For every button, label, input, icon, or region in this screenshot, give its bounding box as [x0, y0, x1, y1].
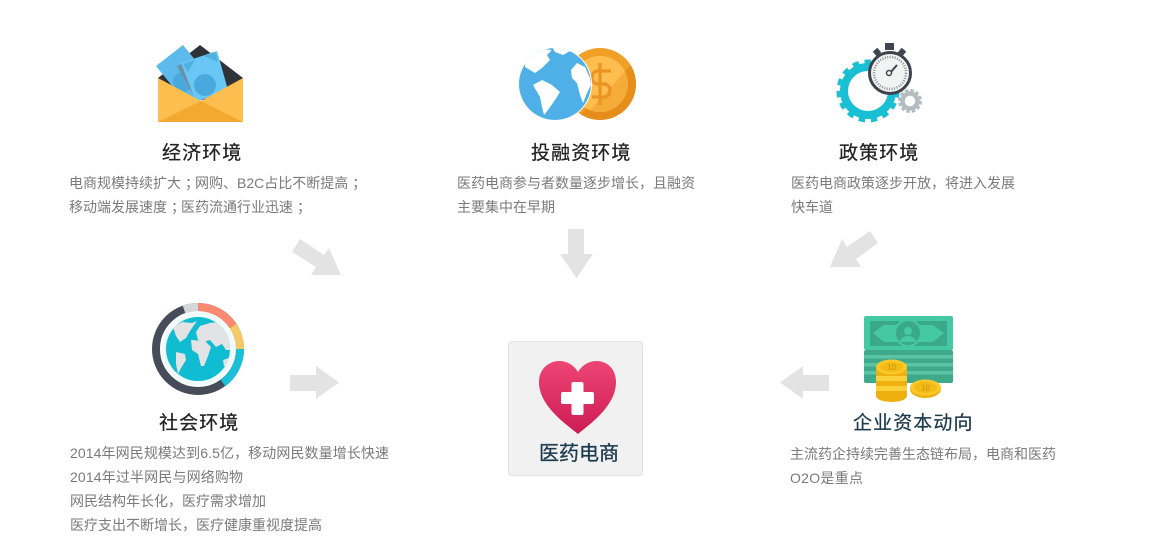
icon: globe and coin [519, 48, 636, 120]
text: policy description [791, 175, 1015, 215]
arrow: economic to center [292, 239, 341, 275]
text: social description: 网民结构年长化，医疗需求增加 [70, 493, 266, 509]
text: economic description [69, 175, 366, 216]
text: policy description: 医药电商政策逐步开放，将进入发展 [791, 175, 1015, 191]
text: social description: 2014年过半网民与网络购物 [70, 469, 243, 485]
panel: investment environment [457, 47, 695, 215]
arrow: capital to center [780, 366, 829, 399]
heading: 社会环境: 社会环境 [159, 412, 239, 434]
text: economic description: 移动端发展速度 ；医药流通行业迅速 ； [69, 199, 311, 216]
text: investment description [457, 175, 695, 215]
text: policy description: 快车道 [791, 199, 833, 215]
icon: cash and coins: 10 [921, 384, 930, 392]
card background [508, 342, 642, 476]
arrow: investment to center [560, 229, 593, 278]
text: capital description: O2O是重点 [790, 470, 863, 486]
panel: policy environment [791, 43, 1015, 215]
text: social description [70, 445, 389, 533]
icon: envelope with banknotes [156, 45, 243, 122]
heading: 投融资环境: 投融资环境 [531, 142, 632, 164]
panel: center pharmaceutical e-commerce [508, 342, 642, 476]
heading: 经济环境: 经济环境 [162, 142, 242, 164]
text: economic description: 电商规模持续扩大 ；网购、B2C占比不断提高 ； [69, 175, 366, 192]
heading: 政策环境: 政策环境 [839, 142, 919, 164]
text: social description: 医疗支出不断增长，医疗健康重视度提高 [70, 517, 322, 533]
icon: cash and coins: 10 [887, 363, 896, 372]
panel: social environment [70, 307, 389, 533]
text: social description: 2014年网民规模达到6.5亿，移动网民数量增长快速 [70, 445, 389, 461]
arrow: social to center [290, 366, 339, 399]
icon: globe with ring [156, 307, 240, 391]
panel: economic environment [69, 45, 366, 216]
heading: 医药电商: 医药电商 [539, 442, 619, 465]
icon: cash and coins [864, 316, 953, 402]
icon: gears and stopwatch [838, 43, 920, 120]
heading: 企业资本动向: 企业资本动向 [853, 412, 974, 434]
text: capital description: 主流药企持续完善生态链布局，电商和医药 [790, 446, 1056, 462]
arrow: policy to center [830, 231, 878, 267]
text: investment description: 主要集中在早期 [457, 199, 555, 215]
panel: enterprise capital [790, 316, 1056, 486]
text: capital description [790, 446, 1056, 486]
text: investment description: 医药电商参与者数量逐步增长，且融资 [457, 175, 695, 191]
icon: heart with cross [539, 361, 616, 434]
